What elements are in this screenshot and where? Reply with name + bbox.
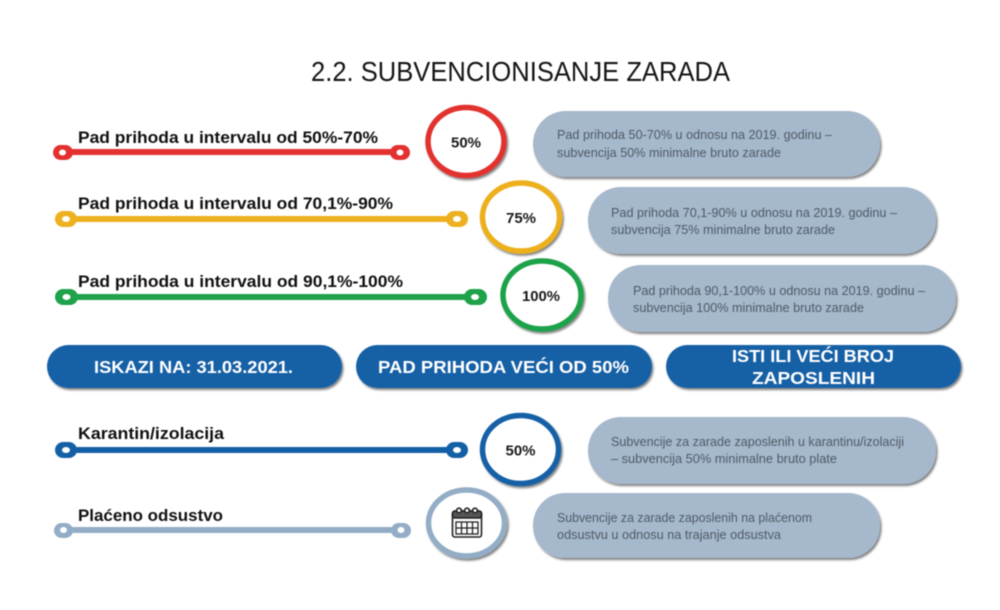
description pill bbox=[533, 111, 880, 177]
label: Pad prihoda u intervalu od 70,1%-90% bbox=[78, 194, 393, 213]
description pill: Pad prihoda 50-70% u odnosu na 2019. godinu – bbox=[557, 128, 832, 142]
row: pad prihoda 50-70 bbox=[53, 108, 880, 177]
description pill: subvencija 50% minimalne bruto zarade bbox=[557, 146, 781, 160]
description pill: Subvencije za zarade zaposlenih u karantinu/izolaciji bbox=[611, 435, 904, 449]
banner: iskazi: ISKAZI NA: 31.03.2021. bbox=[94, 357, 293, 377]
description pill: – subvencija 50% minimalne bruto plate bbox=[611, 452, 837, 466]
icon: calendar bbox=[452, 508, 482, 537]
row: pad prihoda 90,1-100 bbox=[55, 261, 956, 332]
title: 2.2. SUBVENCIONISANJE ZARADA bbox=[311, 56, 730, 87]
description pill: Pad prihoda 90,1-100% u odnosu na 2019. godinu – bbox=[633, 284, 925, 298]
percent circle: 100% bbox=[522, 288, 560, 305]
connector line: red bbox=[53, 145, 410, 160]
connector line: blue bbox=[55, 442, 468, 458]
banner: broj zaposlenih bbox=[666, 345, 961, 388]
banner: pad prihoda: PAD PRIHODA VEĆI OD 50% bbox=[378, 356, 629, 377]
percent circle: 50% bbox=[451, 134, 481, 152]
description pill: Pad prihoda 70,1-90% u odnosu na 2019. godinu – bbox=[611, 206, 897, 220]
description pill bbox=[588, 417, 936, 484]
connector line: yellow bbox=[55, 211, 468, 227]
row: pad prihoda 70,1-90 bbox=[55, 183, 936, 254]
label: Pad prihoda u intervalu od 90,1%-100% bbox=[78, 272, 403, 291]
label: Pad prihoda u intervalu od 50%-70% bbox=[78, 128, 378, 147]
description pill bbox=[608, 265, 956, 332]
description pill: subvencija 75% minimalne bruto zarade bbox=[611, 223, 835, 237]
row: plaćeno odsustvo bbox=[54, 490, 880, 558]
connector line: green bbox=[55, 289, 487, 305]
label: Karantin/izolacija bbox=[78, 424, 225, 443]
connector line: light blue bbox=[54, 523, 411, 538]
description pill: Subvencije za zarade zaposlenih na plaćenom bbox=[557, 511, 812, 525]
percent circle bbox=[428, 108, 504, 176]
percent circle: 50% bbox=[505, 442, 536, 460]
description pill: subvencija 100% minimalne bruto zarade bbox=[633, 301, 864, 315]
description pill bbox=[588, 187, 936, 254]
banner: iskazi bbox=[47, 345, 342, 388]
banner: broj zaposlenih: ZAPOSLENIH bbox=[752, 368, 875, 388]
icon circle bbox=[428, 490, 504, 556]
row: karantin/izolacija bbox=[55, 416, 936, 484]
description pill: odsustvu u odnosu na trajanje odsustva bbox=[557, 528, 781, 542]
banner: pad prihoda bbox=[356, 345, 652, 388]
label: Plaćeno odsustvo bbox=[78, 506, 223, 525]
percent circle: 75% bbox=[506, 210, 536, 227]
percent circle bbox=[482, 416, 558, 484]
description pill bbox=[533, 493, 880, 558]
banner: broj zaposlenih: ISTI ILI VEĆI BROJ bbox=[732, 345, 894, 366]
percent circle bbox=[482, 183, 560, 251]
percent circle bbox=[503, 261, 581, 329]
